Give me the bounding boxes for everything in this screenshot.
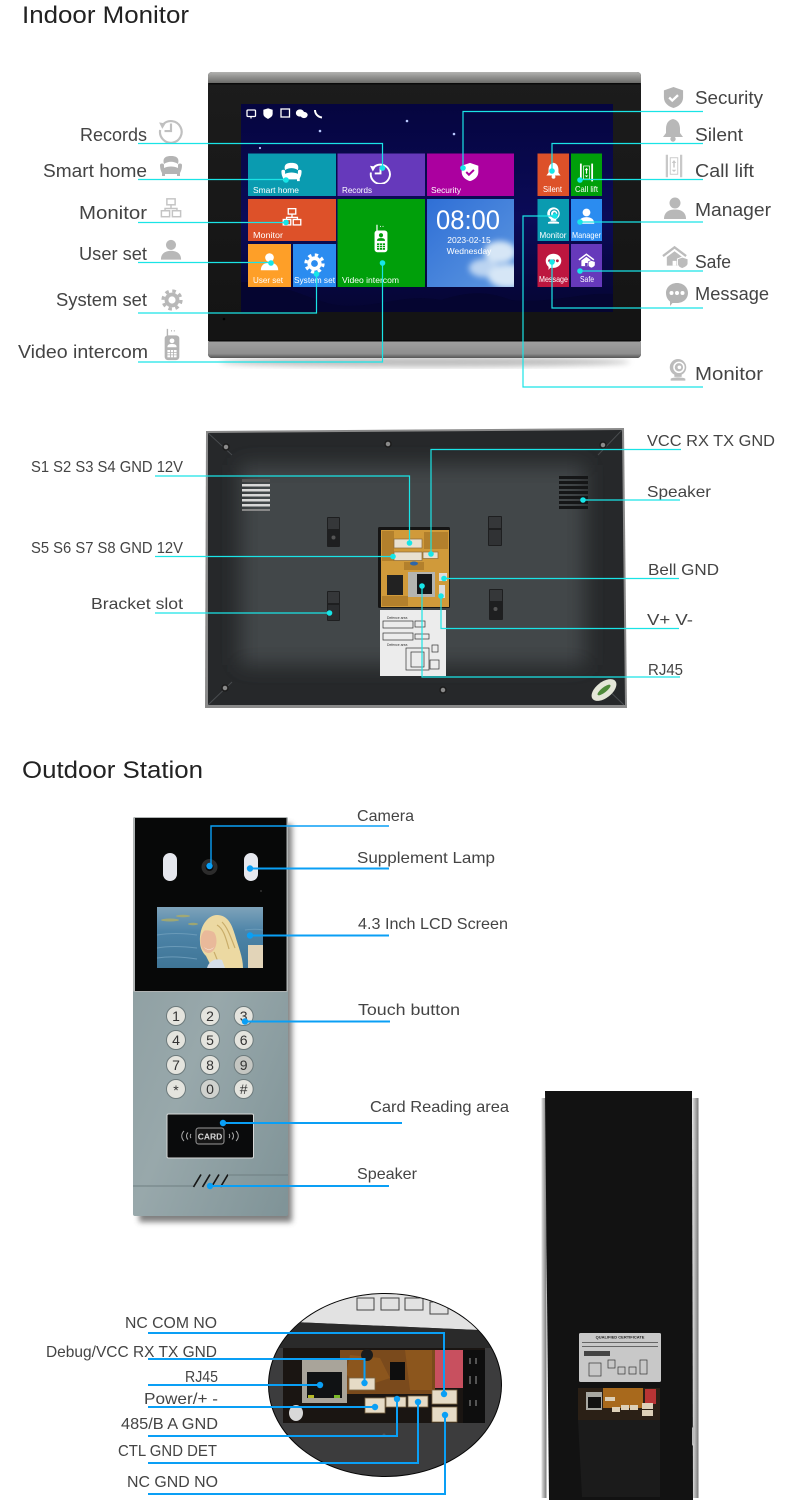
keypad [166,1006,253,1098]
callout: Power [144,1391,378,1410]
callout: S5 S6 S7 S8 GND 12V: S5 S6 S7 S8 GND 12V [31,540,183,557]
wiring label: Defence area [387,616,407,620]
speaker slots [194,1174,228,1187]
callout: Camera [206,808,414,869]
callout: Bracket slot: Bracket slot [91,596,184,613]
callout: Bell GND [441,562,719,581]
callout: RJ45 rear: RJ45 [648,662,683,679]
card reader [167,1114,254,1158]
callout: Camera: Camera [357,808,414,825]
callout: Video intercom [18,260,385,362]
tile: clock [427,199,514,287]
keypad: 3 [240,1008,248,1024]
callout: Manager: Manager [695,200,771,220]
card reader: CARD [198,1132,222,1142]
callout: Smart home [43,156,289,183]
callout: Speaker front: Speaker [357,1166,418,1183]
callout: S1 S2 S3 S4 GND 12V [31,459,412,546]
tile: Smart home: Smart home [253,185,299,195]
callout: RJ45 close-up [148,1369,323,1388]
callout: Call lift: Call lift [695,161,754,181]
tile: clock: 08:00 [436,205,500,235]
callout: V+ V- [438,593,693,629]
tile: Monitor small [538,199,569,241]
tile: System set: System set [294,275,336,285]
callout: User set: User set [79,244,147,264]
callout: Message [549,259,769,308]
keypad: 7 [172,1057,180,1073]
tile: Video intercom [338,199,425,287]
callout: V+ V-: V+ V- [647,612,693,629]
callout: VCC RX TX GND [428,433,775,557]
tile: Call lift [571,154,602,196]
tile: Monitor [248,199,336,241]
callout: Silent [549,119,743,174]
tile: Safe [571,244,602,287]
keypad: * [173,1082,179,1098]
vent: right speaker [559,476,588,509]
keypad: # [240,1081,248,1097]
callout: System set [56,271,319,313]
tile: Monitor small: Monitor [540,230,567,240]
callout: Message: Message [695,284,769,304]
callout: Card Reading area: Card Reading area [370,1099,509,1116]
callout: CTL GND DET [118,1399,421,1463]
tile: Safe: Safe [580,274,594,284]
panel: outdoor station rear [542,1091,698,1500]
bracket slots [327,516,503,621]
callout: RJ45 rear [419,583,683,679]
screws [222,441,606,693]
callout: 485/B A GND [121,1396,400,1436]
tile: Security: Security [431,185,462,195]
callout: Monitor right [523,213,763,387]
tile: Message: Message [539,274,568,284]
callout: Debug/VCC RX TX GND: Debug/VCC RX TX GND [46,1344,217,1361]
tile: Manager: Manager [572,230,601,240]
callout: Card Reading area [220,1099,509,1126]
callout: Records [80,121,385,171]
callout: Safe: Safe [695,252,731,272]
certificate label: QUALIFIED CERTIFICATE [596,1334,645,1340]
callout: VCC RX TX GND: VCC RX TX GND [647,433,775,450]
callout: NC COM NO: NC COM NO [125,1315,217,1332]
tile: Monitor: Monitor [253,230,283,240]
wiring label [380,610,446,676]
sticker [588,675,620,705]
tile: Video intercom: Video intercom [342,275,399,285]
panel: outdoor station front [133,817,292,1222]
LCD screen photo [157,907,263,968]
callout: Bell GND: Bell GND [648,562,719,579]
wiring label: Defence area [387,643,407,647]
panel: terminal close-up [268,1290,502,1480]
callout: 4.3 Inch LCD Screen [247,916,508,939]
callout: Monitor left [79,199,289,225]
callout: Speaker front [207,1166,418,1189]
PCB window [578,1388,660,1420]
callout: CTL GND DET: CTL GND DET [118,1443,217,1460]
tile: Records [338,154,425,196]
panel: indoor monitor rear [205,428,627,708]
callout: RJ45 close-up: RJ45 [185,1369,218,1386]
callout: Records: Records [80,125,147,145]
callout: Bracket slot [91,596,332,616]
callout: 485/B A GND: 485/B A GND [121,1416,218,1433]
callout: 4.3 Inch LCD Screen: 4.3 Inch LCD Screen [358,916,508,933]
tile: Smart home [248,154,336,196]
title: Indoor Monitor: Indoor Monitor [22,2,189,29]
callout: Speaker rear [580,484,712,503]
callout: Touch button [242,1002,460,1025]
callout: Speaker rear: Speaker [647,484,712,501]
tile: Silent [538,154,569,196]
tile: User set: User set [253,275,284,285]
callout: Monitor right: Monitor [695,364,763,384]
tile: clock: 2023-02-15 [447,235,491,245]
tile: Message [538,244,569,287]
tile: System set [293,244,336,287]
tile: User set [248,244,291,287]
tile: Manager [571,199,602,241]
callout: Supplement Lamp [247,850,495,872]
keypad: 0 [206,1081,214,1097]
keypad: 9 [240,1057,248,1073]
keypad: 5 [206,1032,214,1048]
callout: Monitor left: Monitor [79,203,147,223]
keypad: 6 [240,1032,248,1048]
callout: Video intercom: Video intercom [18,342,148,362]
camera [202,859,218,875]
callout: NC COM NO [125,1315,447,1397]
wiring compartment [378,527,450,608]
callout: Security: Security [695,88,763,108]
tile: Records: Records [342,185,372,195]
callout: System set: System set [56,290,147,310]
panel: indoor monitor front [208,72,641,367]
lamps [163,853,177,881]
status bar icons [247,109,322,118]
certificate label [579,1333,661,1382]
callout: Debug/VCC RX TX GND [46,1344,368,1386]
vent: left [242,479,270,511]
callout: Smart home: Smart home [43,161,147,181]
callout: Call lift [577,155,754,183]
callout: Power: Power/+ - [144,1391,218,1408]
callout: NC GND NO: NC GND NO [127,1474,218,1491]
screen: home page [241,104,613,312]
keypad: 1 [172,1008,180,1024]
callout: User set [79,240,274,266]
callout: NC GND NO [127,1412,448,1494]
tile: Silent: Silent [543,184,563,194]
callout: Safe [577,247,731,274]
tile: Security [427,154,514,196]
wiring diagram strip [300,1294,478,1330]
callout: S1 S2 S3 S4 GND 12V: S1 S2 S3 S4 GND 12V [31,459,183,476]
callout: Supplement Lamp: Supplement Lamp [357,850,495,867]
callout: S5 S6 S7 S8 GND 12V [31,540,396,559]
callout: Silent: Silent [695,125,743,145]
callout: Security [460,87,763,171]
keypad: 8 [206,1057,214,1073]
tile: Call lift: Call lift [575,184,599,194]
callout: Touch button: Touch button [358,1002,460,1019]
callout: Manager [577,198,771,225]
tile: clock: Wednesday [447,246,492,256]
title: Outdoor Station: Outdoor Station [22,757,203,784]
keypad: 4 [172,1032,180,1048]
keypad: 2 [206,1008,214,1024]
